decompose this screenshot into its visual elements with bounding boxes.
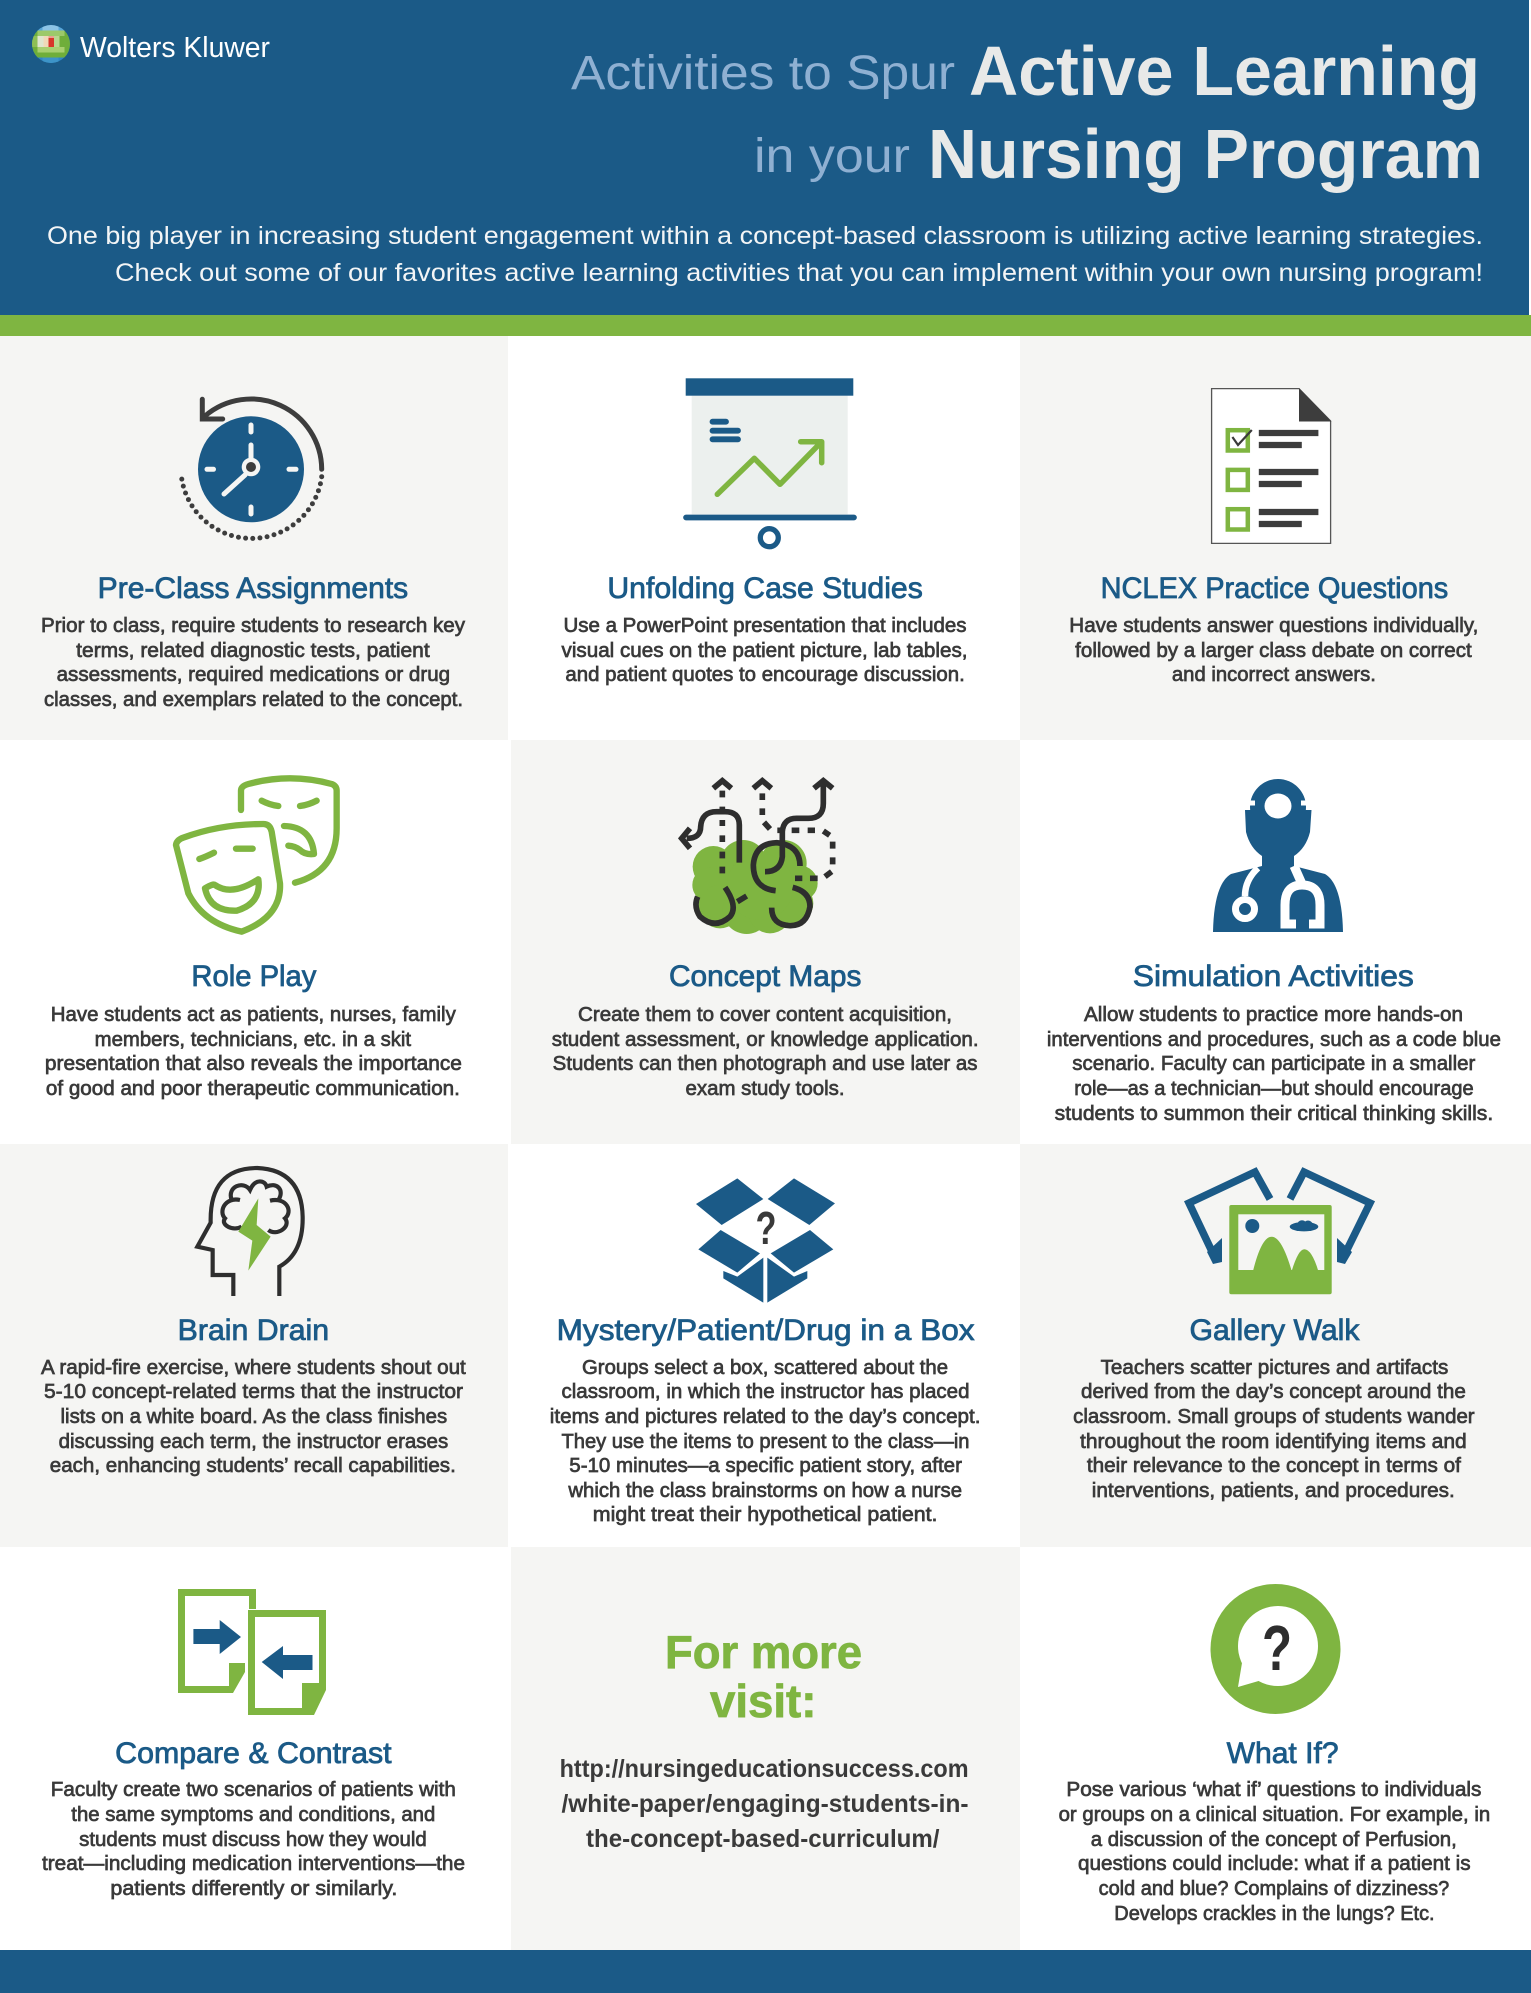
icon: clock with arrow	[181, 399, 322, 538]
body text: of good and poor therapeutic communication.	[46, 1078, 460, 1100]
icon: doctor with stethoscope	[1213, 779, 1343, 932]
intro text: One big player in increasing student engagement within a concept-based classroom is utilizing active learning strategies.	[47, 222, 1483, 250]
body text: students must discuss how they would	[79, 1829, 427, 1851]
body text: terms, related diagnostic tests, patient	[76, 640, 430, 662]
body text: and patient quotes to encourage discussion.	[565, 664, 965, 686]
heading: Gallery Walk	[1190, 1314, 1360, 1347]
heading: For more visit	[665, 1626, 862, 1727]
heading: Brain Drain	[178, 1314, 329, 1347]
body text	[1073, 1357, 1475, 1502]
body text: Groups select a box, scattered about the	[582, 1357, 948, 1379]
web address: the-concept-based-curriculum/	[586, 1825, 940, 1853]
web address	[560, 1755, 969, 1853]
heading: Unfolding Case Studies	[607, 572, 923, 605]
icon: open box with question mark: ?	[756, 1202, 776, 1254]
title: Nursing Program	[928, 115, 1483, 193]
icon: gallery of pictures	[1189, 1172, 1370, 1294]
body text: a discussion of the concept of Perfusion,	[1091, 1829, 1457, 1851]
intro text: Check out some of our favorites active learning activities that you can implement within your own nursing program!	[115, 259, 1483, 287]
body text: Pose various ‘what if’ questions to individuals	[1066, 1779, 1481, 1801]
body text: cold and blue? Complains of dizziness?	[1099, 1878, 1449, 1900]
body text: Develops crackles in the lungs? Etc.	[1114, 1903, 1435, 1925]
body text: classroom, in which the instructor has placed	[562, 1381, 970, 1403]
body text	[1059, 1779, 1490, 1925]
title	[571, 32, 1483, 193]
heading: What If?	[1227, 1737, 1339, 1770]
title: Activities to Spur	[571, 47, 955, 100]
body text	[562, 615, 968, 686]
panel: Concept Maps	[511, 740, 1020, 1144]
icon: logo globe	[32, 25, 70, 63]
body text: and incorrect answers.	[1172, 664, 1376, 686]
heading: Simulation Activities	[1133, 960, 1414, 993]
body text: followed by a larger class debate on correct	[1075, 640, 1472, 662]
body text: 5-10 minutes—a specific patient story, after	[569, 1455, 962, 1477]
logo: Wolters Kluwer: Wolters Kluwer	[80, 32, 270, 64]
panel: Unfolding Case Studies	[508, 336, 1020, 740]
body text	[41, 1357, 466, 1477]
body text: Have students answer questions individually,	[1069, 615, 1478, 637]
title: in your	[754, 130, 910, 183]
web address: http://nursingeducationsuccess.com	[560, 1755, 969, 1783]
panel: Simulation Activities	[1020, 740, 1531, 1144]
panel: For more visit	[511, 1547, 1020, 1950]
body text: 5-10 concept-related terms that the instructor	[44, 1381, 463, 1403]
body text: each, enhancing students’ recall capabilities.	[50, 1455, 456, 1477]
body text: items and pictures related to the day’s concept.	[550, 1406, 980, 1428]
body text: Students can then photograph and use later as	[553, 1053, 978, 1075]
panel: What If?	[1020, 1547, 1531, 1950]
body text: Teachers scatter pictures and artifacts	[1101, 1357, 1448, 1379]
body text: classes, and exemplars related to the concept.	[44, 689, 463, 711]
body text: A rapid-fire exercise, where students shout out	[41, 1357, 466, 1379]
green band	[0, 315, 1531, 336]
body text: Allow students to practice more hands-on	[1084, 1004, 1463, 1026]
body text: students to summon their critical thinking skills.	[1055, 1103, 1493, 1125]
title: Active Learning	[969, 32, 1480, 110]
panel: Brain Drain	[0, 1144, 508, 1547]
body text: Prior to class, require students to research key	[41, 615, 465, 637]
icon: projection screen with chart	[686, 378, 854, 547]
header banner	[0, 0, 1529, 315]
body text	[45, 1004, 462, 1100]
heading: Compare & Contrast	[115, 1737, 392, 1770]
body text	[1047, 1004, 1501, 1125]
icon: head with brain and lightning bolt	[197, 1168, 303, 1296]
web address: /white-paper/engaging-students-in-	[562, 1790, 968, 1818]
footer band	[0, 1950, 1531, 1993]
body text: might treat their hypothetical patient.	[593, 1504, 938, 1526]
body text: role—as a technician—but should encourage	[1074, 1078, 1474, 1100]
heading: NCLEX Practice Questions	[1101, 572, 1448, 605]
body text: throughout the room identifying items and	[1080, 1431, 1467, 1453]
heading: Pre-Class Assignments	[98, 572, 408, 605]
body text: which the class brainstorms on how a nurse	[567, 1480, 962, 1502]
panel: Gallery Walk	[1020, 1144, 1531, 1547]
body text	[1069, 615, 1478, 686]
icon: two documents with arrows	[178, 1589, 326, 1715]
body text: treat—including medication interventions—the	[42, 1853, 465, 1875]
heading: For more visit: For more	[665, 1626, 862, 1678]
body text: exam study tools.	[686, 1078, 844, 1100]
body text: or groups on a clinical situation. For example, in	[1059, 1804, 1490, 1826]
body text	[41, 615, 465, 711]
heading: Concept Maps	[669, 960, 861, 993]
body text: visual cues on the patient picture, lab tables,	[562, 640, 968, 662]
body text	[552, 1004, 979, 1100]
body text: questions could include: what if a patient is	[1078, 1853, 1471, 1875]
body text: scenario. Faculty can participate in a smaller	[1072, 1053, 1476, 1075]
body text	[42, 1779, 465, 1900]
logo: Wolters Kluwer	[32, 25, 270, 64]
body text: interventions, patients, and procedures.	[1092, 1480, 1455, 1502]
body text: Use a PowerPoint presentation that includes	[564, 615, 966, 637]
body text: classroom. Small groups of students wander	[1073, 1406, 1475, 1428]
body text: Faculty create two scenarios of patients with	[51, 1779, 456, 1801]
body text: Create them to cover content acquisition,	[578, 1004, 952, 1026]
body text: patients differently or similarly.	[110, 1878, 397, 1900]
body text: lists on a white board. As the class finishes	[60, 1406, 447, 1428]
intro text	[47, 222, 1483, 287]
body text: their relevance to the concept in terms of	[1087, 1455, 1461, 1477]
body text: Have students act as patients, nurses, family	[51, 1004, 456, 1026]
icon: brain with branching arrows	[682, 781, 833, 934]
panel: Pre-Class Assignments	[0, 336, 508, 740]
icon: theatre masks	[176, 778, 337, 932]
body text: assessments, required medications or drug	[57, 664, 450, 686]
panel: Compare & Contrast	[0, 1547, 511, 1950]
icon: question speech bubble: ?	[1262, 1612, 1292, 1684]
icon: checklist document	[1212, 388, 1332, 543]
body text: interventions and procedures, such as a code blue	[1047, 1029, 1501, 1051]
icon: open box with question mark	[696, 1178, 835, 1303]
body text: the same symptoms and conditions, and	[71, 1804, 435, 1826]
heading: Role Play	[191, 960, 316, 993]
panel: NCLEX Practice Questions	[1020, 336, 1531, 740]
icon: question speech bubble	[1210, 1584, 1340, 1714]
heading: For more visit: visit:	[710, 1675, 816, 1727]
body text: presentation that also reveals the importance	[45, 1053, 462, 1075]
panel: Role Play	[0, 740, 511, 1144]
body text: derived from the day’s concept around the	[1081, 1381, 1466, 1403]
heading: Mystery/Patient/Drug in a Box	[557, 1314, 975, 1347]
body text	[550, 1357, 980, 1526]
panel: Mystery/Patient/Drug in a Box	[508, 1144, 1020, 1547]
body text: student assessment, or knowledge application.	[552, 1029, 979, 1051]
body text: discussing each term, the instructor erases	[59, 1431, 448, 1453]
body text: members, technicians, etc. in a skit	[95, 1029, 412, 1051]
body text: They use the items to present to the class—in	[562, 1431, 970, 1453]
